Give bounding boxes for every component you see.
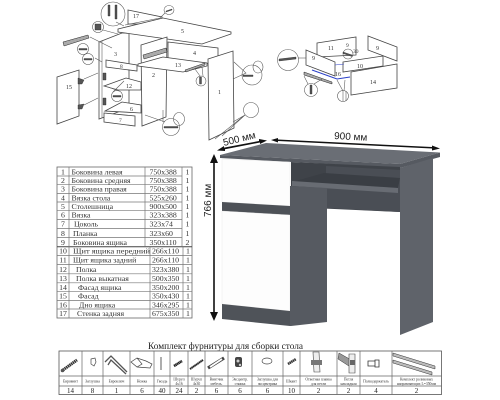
drawer bottom 16 (blue edges): 16: [335, 72, 341, 78]
panel 2: middle side: [141, 37, 167, 126]
row numbers: 9: [61, 238, 65, 247]
right leg: [400, 158, 433, 335]
drawer front 10: [343, 56, 383, 72]
row numbers: 11: [59, 256, 67, 265]
hardware labels: Шкант: [286, 380, 297, 384]
hardware labels: стяжка: [235, 382, 246, 386]
hardware labels: эксцентрика: [258, 382, 278, 386]
row numbers: 4: [61, 193, 65, 202]
row sizes: 323х74: [150, 220, 173, 229]
interior back panel: [291, 162, 400, 212]
panel 13: pull-out shelf: [138, 57, 207, 72]
parts table: [57, 167, 192, 318]
panel 13: pull-out shelf: 13: [175, 63, 181, 69]
panel 4: rail: [168, 42, 218, 64]
drawer facade 14: 14: [370, 80, 376, 86]
panel 2: middle side: 2: [152, 73, 155, 79]
row sizes: 750х388: [150, 185, 177, 194]
row sizes: 346х295: [152, 300, 179, 309]
hardware labels: Петля: [344, 378, 353, 382]
drawer front: [222, 159, 290, 206]
row names: Боковина левая: [72, 167, 123, 176]
row quantities: 1: [186, 265, 190, 274]
drawer detail circles: [253, 43, 359, 102]
dimension: 900 mm: [271, 131, 440, 150]
row numbers: 14: [59, 283, 67, 292]
icon: hinge plate: [311, 352, 322, 372]
row quantities: 1: [186, 300, 190, 309]
row quantities: 1: [186, 256, 190, 265]
hardware quantities: 6: [266, 387, 270, 395]
row names: [72, 167, 150, 318]
row quantities: 1: [186, 202, 190, 211]
row quantities: 1: [186, 193, 190, 202]
hardware labels: Заглушка: [85, 380, 100, 384]
panel 15: facade: [57, 70, 79, 124]
drawer side 9 right: [368, 36, 397, 61]
row sizes: 900х500: [150, 202, 177, 211]
hardware quantities: 6: [238, 387, 242, 395]
plinth: [222, 304, 290, 326]
row numbers: 13: [59, 274, 67, 283]
row names: Столешница: [72, 202, 114, 211]
icon: screw 4x16: [174, 361, 182, 366]
hardware quantities: 2: [347, 387, 351, 395]
hardware quantities: 6: [215, 387, 219, 395]
row sizes: 350х200: [152, 283, 179, 292]
row sizes: 323х388: [150, 211, 177, 220]
hardware quantities: 2: [317, 387, 321, 395]
dimension: 500 mm: [217, 130, 267, 151]
row numbers: 3: [61, 185, 65, 194]
row quantities: 2: [186, 238, 190, 247]
row sizes: 350х430: [152, 292, 179, 301]
runner and details: [63, 35, 112, 62]
row names: Стенка задняя: [77, 309, 124, 318]
icon: eccentric cap: [262, 358, 272, 364]
keyboard shelf: [292, 173, 400, 188]
row numbers: 16: [59, 300, 67, 309]
row numbers: 8: [61, 229, 65, 238]
row quantities: 1: [186, 229, 190, 238]
hardware labels: Ответная планка: [305, 378, 332, 382]
drawer side 9 left: 9: [312, 56, 315, 62]
hardware labels: Ножка: [137, 380, 148, 384]
row names: Цоколь: [74, 220, 99, 229]
row names: Полка: [76, 265, 97, 274]
hardware quantities: 1: [115, 387, 119, 395]
row numbers: 7: [61, 220, 65, 229]
row names: Вязка стола: [72, 193, 111, 202]
row names: Боковина правая: [72, 185, 127, 194]
desk product render: [220, 143, 440, 335]
drawer front 10: 10: [357, 64, 363, 70]
icon: dowel: [288, 359, 296, 364]
hardware quantities: 10: [288, 387, 296, 395]
panel 3: right side: 3: [114, 52, 117, 58]
panel 8: strip: [106, 60, 137, 71]
icon: euro screw: [61, 360, 77, 372]
panel 7: plinth: [104, 113, 135, 126]
hardware labels: Шуруп: [173, 378, 185, 382]
exploded assembly diagram: drawer: [253, 36, 397, 102]
panel 6: brace: 6: [130, 107, 133, 113]
icon: furniture bolt: [208, 358, 224, 368]
row numbers: 6: [61, 211, 65, 220]
row quantities: 1: [186, 274, 190, 283]
hardware labels: Комплект роликовых: [400, 378, 433, 382]
hardware labels: Евровинт: [63, 380, 78, 384]
drawer runner: [304, 72, 332, 96]
drawer back panel 11: [317, 37, 356, 57]
icon: cap: [91, 358, 96, 366]
drawer detail circles: 9: [346, 43, 349, 49]
row quantities: 1: [186, 176, 190, 185]
row sizes: 500х350: [152, 274, 179, 283]
icon: leg: [131, 358, 152, 368]
row quantities: 1: [186, 309, 190, 318]
row sizes: 323х380: [152, 265, 179, 274]
panel 4: rail: 4: [193, 51, 196, 57]
row sizes: 266х110: [152, 247, 179, 256]
icon: euro key: [105, 356, 127, 374]
hardware quantities: 2: [415, 387, 419, 395]
row names: Полка выкатная: [76, 274, 129, 283]
dimension: 900 mm: 900 мм: [334, 131, 368, 144]
row names: Боковина ящика: [73, 238, 128, 247]
panel 12: shelf: [104, 78, 141, 90]
hardware labels: 4х16: [175, 382, 183, 386]
hardware labels: Полкодержатель: [363, 380, 389, 384]
dimension: 766 mm: 766 мм: [203, 184, 214, 217]
hardware table: [59, 351, 442, 395]
panel 17: back wall: 17: [133, 14, 139, 20]
hardware quantities: 40: [158, 387, 166, 395]
row quantities: 1: [186, 292, 190, 301]
panel 5: desktop: 5: [181, 29, 184, 35]
hardware quantities: 2: [195, 387, 199, 395]
hardware heading: Комплект фурнитуры для сборки стола: [148, 341, 304, 352]
row sizes: 750х388: [150, 167, 177, 176]
icon: drawer runners: [393, 353, 435, 375]
icon: eccentric tie: [235, 357, 242, 367]
panel 17: back wall: [128, 10, 162, 24]
row sizes: 323х60: [150, 229, 173, 238]
row quantities: 1: [186, 247, 190, 256]
row names: Фасад ящика: [78, 283, 122, 292]
hardware labels: Эксцентр.: [232, 378, 248, 382]
hardware labels: Заглушка для: [257, 378, 278, 382]
hardware labels: направляющих L=350мм: [397, 382, 437, 386]
hardware quantities: 14: [67, 387, 74, 395]
row quantities: [186, 167, 190, 318]
detail circles: [78, 2, 262, 139]
row quantities: 1: [186, 220, 190, 229]
hardware labels: Евроключ: [109, 380, 125, 384]
row numbers: 1: [61, 167, 65, 176]
drawer gap: [222, 202, 290, 215]
dimension: 500 mm: 500 мм: [222, 130, 257, 149]
row sizes: 350х110: [150, 238, 177, 247]
drawer side 9 left: [306, 50, 335, 76]
icon: overlay hinge: [338, 353, 355, 373]
drawer back panel 11: 11: [328, 46, 334, 52]
row numbers: 15: [59, 292, 67, 301]
hardware labels: Гвоздь: [157, 380, 168, 384]
hardware labels: Шуруп: [191, 378, 202, 382]
row numbers: 2: [61, 176, 65, 185]
row quantities: 1: [186, 283, 190, 292]
icon: shelf support: [368, 360, 379, 367]
panel 6: brace: [105, 102, 141, 113]
hardware labels: мебель.: [211, 382, 223, 386]
panel 5: desktop: [118, 18, 231, 44]
row numbers: [59, 167, 67, 318]
row names: Фасад: [78, 292, 99, 301]
drawer detail circles: 30: [353, 49, 359, 55]
row quantities: 1: [186, 185, 190, 194]
door: [222, 211, 290, 311]
panel 1: left side: 1: [218, 90, 221, 96]
hardware labels: Винтчик: [210, 378, 224, 382]
dimension: 766 mm: [203, 154, 218, 321]
row numbers: 5: [61, 202, 65, 211]
hardware labels: для петли: [311, 382, 326, 386]
desk top: [220, 143, 440, 164]
drawer side 9 right: 9: [376, 46, 379, 52]
panel 1: left side: [208, 51, 234, 140]
drawer facade 14: [351, 64, 397, 95]
panel 8: strip: 8: [120, 64, 123, 70]
row quantities: 1: [186, 211, 190, 220]
row quantities: 1: [186, 167, 190, 176]
row sizes: 266х110: [152, 256, 179, 265]
icon: nail: [160, 357, 162, 370]
hardware labels: 4х30: [193, 382, 200, 386]
hardware labels: [63, 378, 437, 386]
row sizes: 525х260: [150, 193, 177, 202]
pedestal side: [291, 186, 327, 326]
hardware quantities: 4: [374, 387, 378, 395]
row sizes: 675х350: [152, 309, 179, 318]
hinges: [78, 73, 106, 109]
row sizes: 750х388: [150, 176, 177, 185]
icon: screw 4x30: [190, 360, 203, 369]
row sizes: [150, 167, 179, 318]
panel 15: facade: 15: [66, 85, 72, 91]
panel 3: right side: [99, 33, 129, 119]
row names: Щит ящика задний: [73, 256, 136, 265]
hardware quantities: 6: [140, 387, 144, 395]
hardware quantities: [67, 387, 419, 395]
row names: Планка: [73, 229, 98, 238]
hardware labels: накладная: [340, 382, 357, 386]
row numbers: 17: [59, 309, 67, 318]
row names: Щит ящика передний: [73, 247, 150, 256]
drawer bottom 16 (blue edges): [312, 64, 350, 79]
row names: Вязка: [72, 211, 91, 220]
panel 7: plinth: 7: [119, 118, 122, 124]
row numbers: 10: [59, 247, 67, 256]
hardware quantities: 24: [176, 387, 183, 395]
row names: Боковина средняя: [72, 176, 131, 185]
hardware quantities: 8: [91, 387, 95, 395]
row numbers: 12: [59, 265, 67, 274]
exploded assembly diagram: desk: [57, 2, 262, 140]
panel 12: shelf: 12: [126, 84, 132, 90]
row names: Дно ящика: [79, 300, 116, 309]
